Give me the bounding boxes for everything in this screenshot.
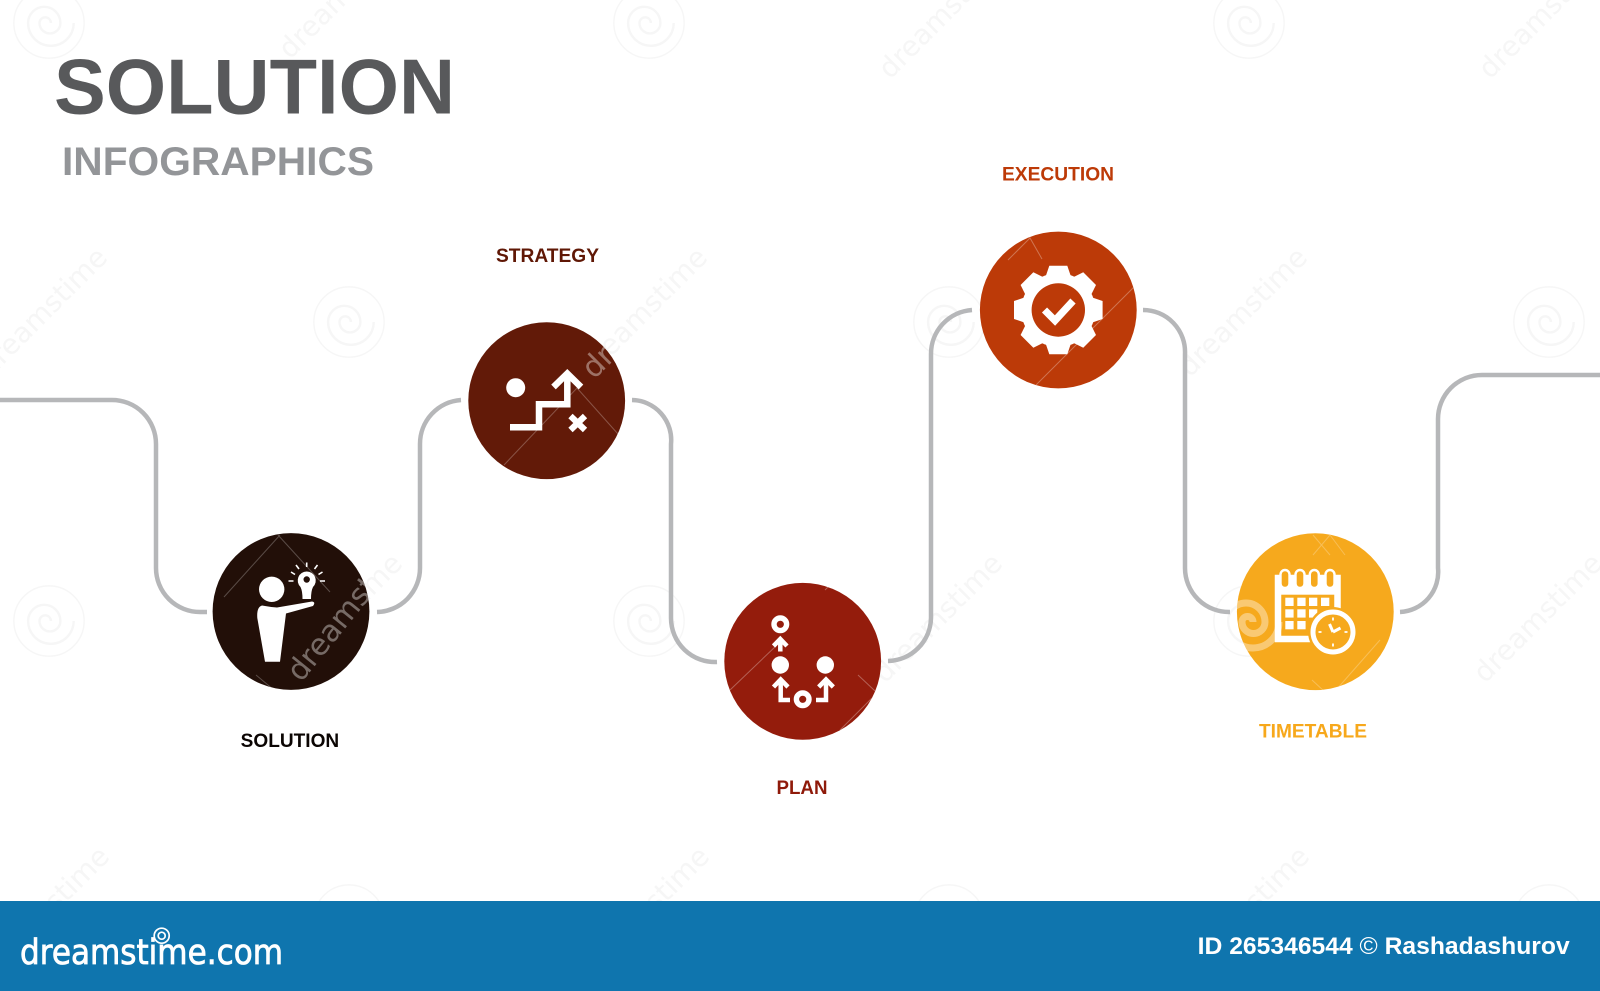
infographic canvas: dreamstime bbox=[1172, 241, 1314, 383]
watermark on solution circle: dreamstime bbox=[280, 526, 421, 688]
circle: plan bbox=[724, 583, 881, 740]
connector path: strategy to plan bbox=[632, 400, 717, 662]
icon: strategy stairs arrow bbox=[506, 374, 585, 430]
step: strategy bbox=[468, 248, 626, 480]
infographic canvas: dreamstime bbox=[267, 547, 409, 689]
footer credit: ID 265346544 © Rashadashurov bbox=[1198, 933, 1570, 960]
label: execution: EXECUTION bbox=[1002, 164, 1114, 186]
label: timetable: TIMETABLE bbox=[1259, 722, 1367, 743]
connector path: plan to execution bbox=[888, 310, 972, 661]
watermark on strategy circle: dreamstime bbox=[575, 233, 727, 386]
icon: plan play diagram bbox=[772, 618, 834, 706]
connector path: entry to solution bbox=[0, 400, 207, 612]
label: solution: SOLUTION bbox=[241, 731, 339, 752]
infographic canvas: dreamstime bbox=[867, 547, 1009, 689]
icon: dreamstime spiral bbox=[154, 928, 169, 943]
watermark on solution circle bbox=[224, 534, 368, 688]
watermark on plan circle bbox=[730, 587, 876, 730]
watermark on execution circle bbox=[1008, 238, 1136, 385]
footer logo: dreamstime.com: dreamstime.com bbox=[20, 933, 283, 973]
icon: person with light bulb bbox=[257, 562, 325, 662]
subtitle: INFOGRAPHICS bbox=[62, 140, 374, 184]
step: plan bbox=[724, 580, 890, 799]
connector path: execution to timetable bbox=[1143, 310, 1230, 612]
circle: solution bbox=[213, 533, 369, 690]
title: SOLUTION bbox=[54, 42, 455, 130]
icon: gear with check mark bbox=[1014, 266, 1103, 354]
label: plan: PLAN bbox=[776, 778, 828, 799]
step: solution bbox=[212, 533, 370, 747]
label: strategy: STRATEGY bbox=[496, 246, 599, 267]
footer band bbox=[0, 901, 1600, 991]
connector path: timetable to exit bbox=[1400, 375, 1600, 612]
infographic canvas: dreamstime bbox=[1174, 840, 1316, 982]
connector path: solution to strategy bbox=[377, 400, 461, 612]
icon: calendar with clock bbox=[1275, 570, 1358, 657]
watermark on timetable circle bbox=[1227, 535, 1380, 692]
watermark on strategy circle bbox=[504, 346, 618, 466]
step: timetable bbox=[1227, 533, 1394, 743]
circle: execution bbox=[980, 232, 1137, 388]
infographic canvas: dreamstime bbox=[572, 241, 714, 383]
step: execution bbox=[980, 164, 1137, 388]
circle: strategy bbox=[468, 322, 625, 479]
circle: timetable bbox=[1237, 533, 1394, 690]
infographic canvas: dreamstime bbox=[574, 840, 716, 982]
